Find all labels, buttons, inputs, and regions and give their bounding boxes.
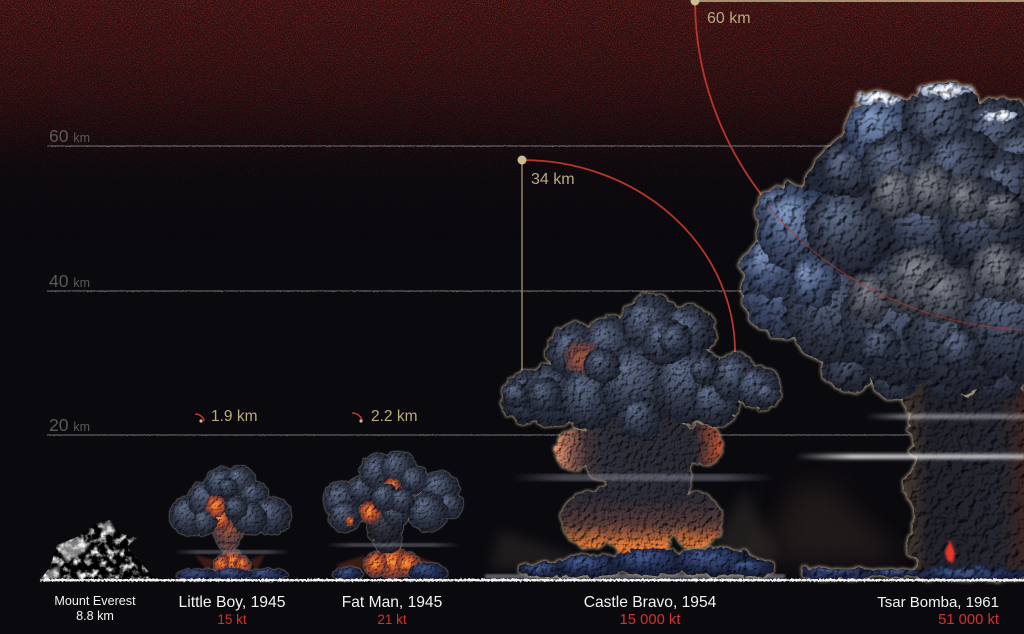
top altitude line for Tsar Bomba <box>695 0 1024 2</box>
altitude labels: 40 km <box>49 271 90 291</box>
Little Boy base <box>176 568 288 581</box>
Little Boy stem <box>208 506 250 574</box>
ground line <box>40 579 1024 581</box>
Fat Man radius annotation <box>352 408 418 425</box>
Tsar Bomba radius dot <box>690 0 700 6</box>
Castle Bravo radius vertical line <box>521 160 523 372</box>
Castle Bravo base <box>519 548 774 577</box>
label: Mount Everest: Mount Everest <box>54 594 136 608</box>
altitude labels: 60 km <box>49 126 90 146</box>
blast rays Castle Bravo <box>485 470 900 579</box>
Little Boy cap <box>170 466 291 536</box>
Castle Bravo radius label: 34 km <box>531 171 575 188</box>
label: Little Boy: 15 kt <box>217 612 247 627</box>
Little Boy radius value: 1.9 km <box>211 408 258 425</box>
label: Mount Everest <box>54 594 136 623</box>
altitude labels <box>49 126 90 435</box>
Castle Bravo cap <box>502 295 780 440</box>
label: Tsar Bomba: 51 000 kt <box>938 612 999 628</box>
Little Boy radius annotation <box>195 408 258 425</box>
Tsar Bomba base <box>800 568 1024 580</box>
label: Mount Everest: 8.8 km <box>76 609 114 623</box>
Tsar Bomba stem <box>903 373 1024 580</box>
altitude grid lines <box>47 146 910 435</box>
Tsar Bomba faint arc over cloud <box>767 205 1024 330</box>
label: Little Boy <box>179 594 286 627</box>
Tsar Bomba snow-lit top <box>856 84 1018 122</box>
Fat Man base <box>333 563 448 581</box>
label: Castle Bravo: Castle Bravo, 1954 <box>584 594 717 611</box>
label: Fat Man: Fat Man, 1945 <box>342 594 443 611</box>
Fat Man ring <box>326 543 460 547</box>
Fat Man cap <box>323 451 463 532</box>
Mount Everest <box>40 520 158 580</box>
label: Castle Bravo: 15 000 kt <box>620 612 680 628</box>
Tsar Bomba radius arc <box>695 0 1024 330</box>
label: Fat Man <box>342 594 443 627</box>
label: Fat Man: 21 kt <box>377 612 407 627</box>
Tsar Bomba radius label: 60 km <box>707 10 751 27</box>
Tsar Bomba rings <box>795 414 1024 459</box>
Tsar Bomba cap <box>742 83 1024 400</box>
icon: small radius arc <box>352 413 363 423</box>
label: Castle Bravo <box>584 594 717 628</box>
Tsar Bomba ember <box>945 540 955 563</box>
Fat Man radius value: 2.2 km <box>371 408 418 425</box>
Castle Bravo ring <box>512 474 774 481</box>
altitude labels: 20 km <box>49 415 90 435</box>
Little Boy ring <box>174 550 290 554</box>
Fat Man stem <box>364 508 420 578</box>
Castle Bravo lower stem <box>562 483 722 559</box>
mushroom cloud: Castle Bravo <box>502 295 780 577</box>
mushroom cloud: Little Boy <box>170 466 291 581</box>
red sky glow <box>0 0 1024 208</box>
label: Tsar Bomba: Tsar Bomba, 1961 <box>877 594 999 611</box>
blast rays Little Boy and Fat Man <box>195 554 440 575</box>
Tsar Bomba rays <box>780 470 910 570</box>
mushroom cloud: Tsar Bomba <box>742 83 1024 580</box>
Castle Bravo radius dot <box>518 156 526 164</box>
Castle Bravo radius arc <box>522 160 735 352</box>
Castle Bravo upper stem <box>555 414 722 506</box>
mushroom cloud: Fat Man <box>323 451 463 581</box>
label: Tsar Bomba <box>877 594 999 628</box>
label: Little Boy: Little Boy, 1945 <box>179 594 286 611</box>
icon: small radius arc <box>195 414 204 423</box>
